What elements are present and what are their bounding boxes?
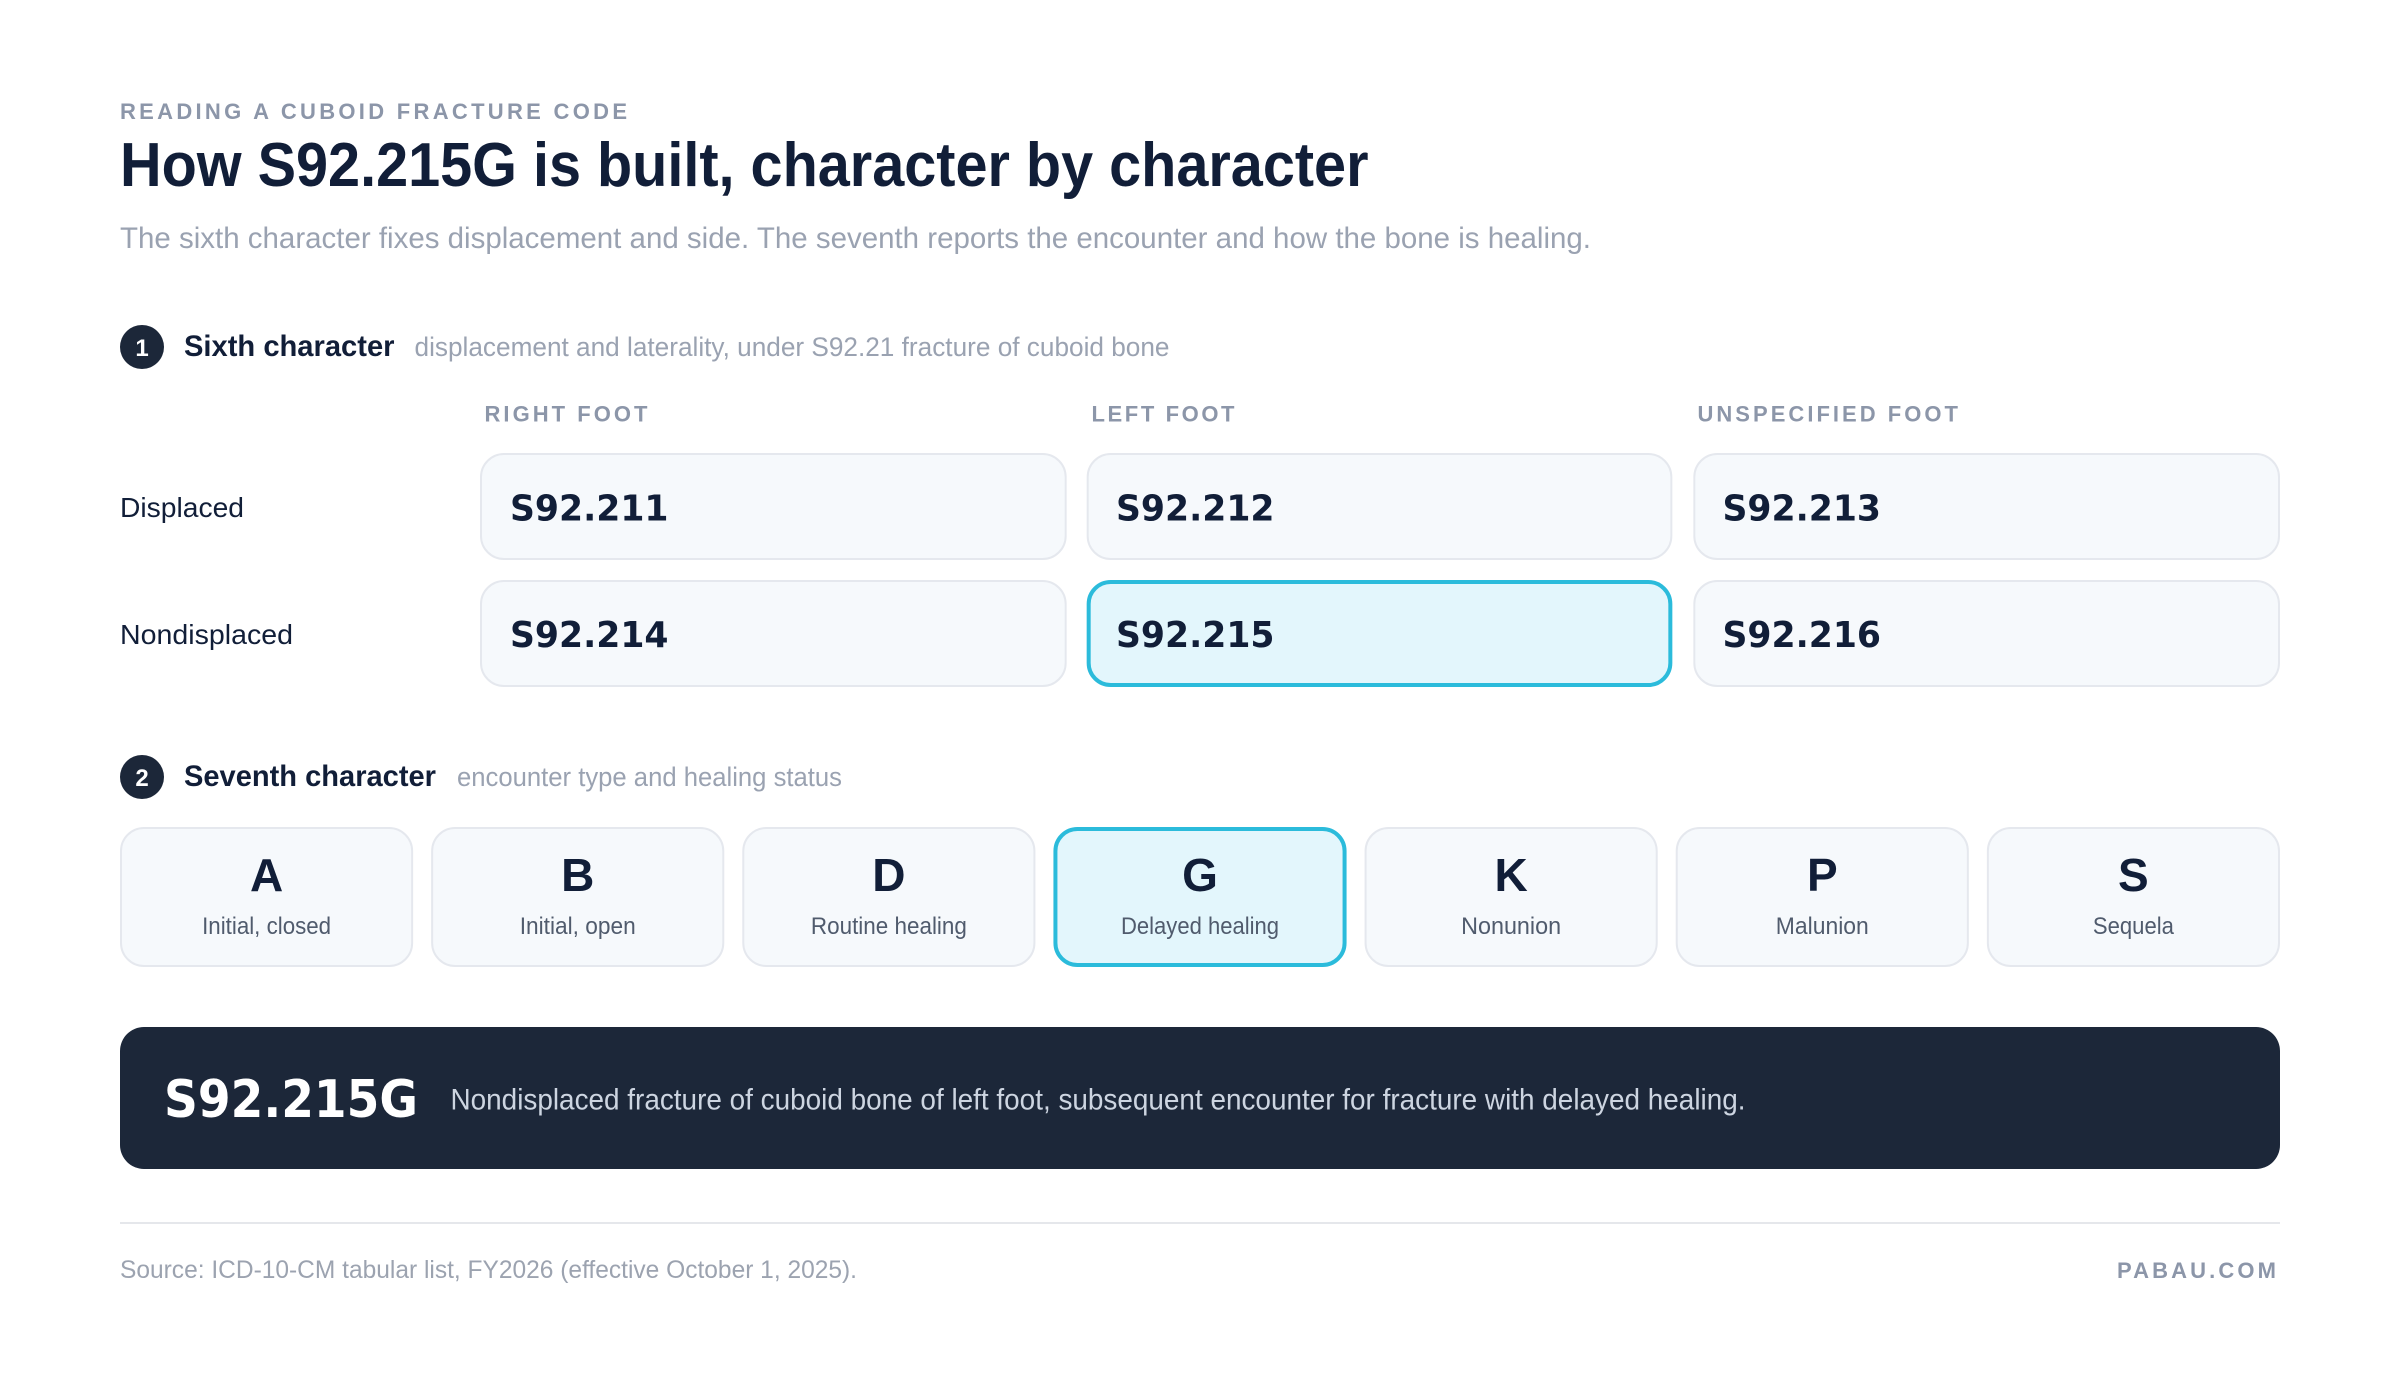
source note: Source: ICD-10-CM tabular list, FY2026 (effective October 1, 2025). [120,1256,857,1284]
option P: P [1807,849,1838,901]
row label: displaced: Displaced [120,492,244,523]
subtitle: The sixth character fixes displacement and side. The seventh reports the encounter and how the bone is healing. [120,222,1591,255]
option D: Routine healing [811,913,967,940]
section 2 description: encounter type and healing status [457,762,842,792]
option K: K [1494,849,1528,901]
option A [121,828,412,966]
option S: Sequela [2093,913,2174,940]
code cell S92.212: S92.212 [1116,488,1274,530]
option K: Nonunion [1461,913,1561,940]
title: How S92.215G is built, character by character [120,131,1368,200]
panel: sixth character grid [120,402,2279,686]
code meaning: Nondisplaced fracture of cuboid bone of left foot, subsequent encounter for fracture with delayed healing. [450,1084,1746,1116]
result banner [120,1027,2280,1169]
section 1 title: Sixth character [184,330,395,363]
option K [1366,828,1657,966]
badge 2: 2 [135,765,149,792]
badge 1: 1 [135,335,149,362]
option D: D [872,849,906,901]
badge 2 [120,755,164,799]
code cell S92.216 [1694,581,2279,686]
option A: Initial, closed [202,913,331,940]
section 2 heading [120,755,842,799]
eyebrow: READING A CUBOID FRACTURE CODE [120,99,627,124]
section 1 description: displacement and laterality, under S92.21 fracture of cuboid bone [414,332,1170,362]
panel: seventh character options [121,828,2279,966]
code cell S92.212 [1088,454,1671,559]
code cell S92.213: S92.213 [1722,488,1881,530]
section 1 heading [120,325,1170,369]
full code: S92.215G [164,1070,418,1130]
option G highlighted [1055,829,1345,965]
code cell S92.215 highlighted: S92.215 [1116,615,1274,656]
column header: left foot: LEFT FOOT [1092,402,1235,426]
column header: right foot: RIGHT FOOT [484,402,648,426]
code cell S92.214: S92.214 [510,615,668,656]
option G highlighted: Delayed healing [1121,913,1279,940]
option S: S [2118,849,2149,901]
option B: B [561,849,594,901]
code cell S92.211: S92.211 [510,488,668,530]
code cell S92.215 highlighted [1089,582,1670,685]
row label: nondisplaced: Nondisplaced [120,619,293,650]
column header: unspecified foot: UNSPECIFIED FOOT [1698,402,1959,426]
option P [1677,828,1968,966]
code cell S92.211 [481,454,1066,559]
brand: PABAU.COM [2117,1258,2276,1283]
footer [120,1222,2280,1284]
section 2 title: Seventh character [184,760,436,793]
option S [1988,828,2279,966]
code cell S92.214 [481,581,1066,686]
option B: Initial, open [520,913,636,940]
option B [432,828,723,966]
option G highlighted: G [1182,849,1218,901]
option P: Malunion [1776,913,1869,940]
footer divider [120,1222,2280,1224]
header block [120,99,1591,255]
badge 1 [120,325,164,369]
option D [743,828,1034,966]
option A: A [250,849,283,901]
code cell S92.213 [1694,454,2279,559]
code cell S92.216: S92.216 [1722,615,1881,656]
banner background [120,1027,2280,1169]
